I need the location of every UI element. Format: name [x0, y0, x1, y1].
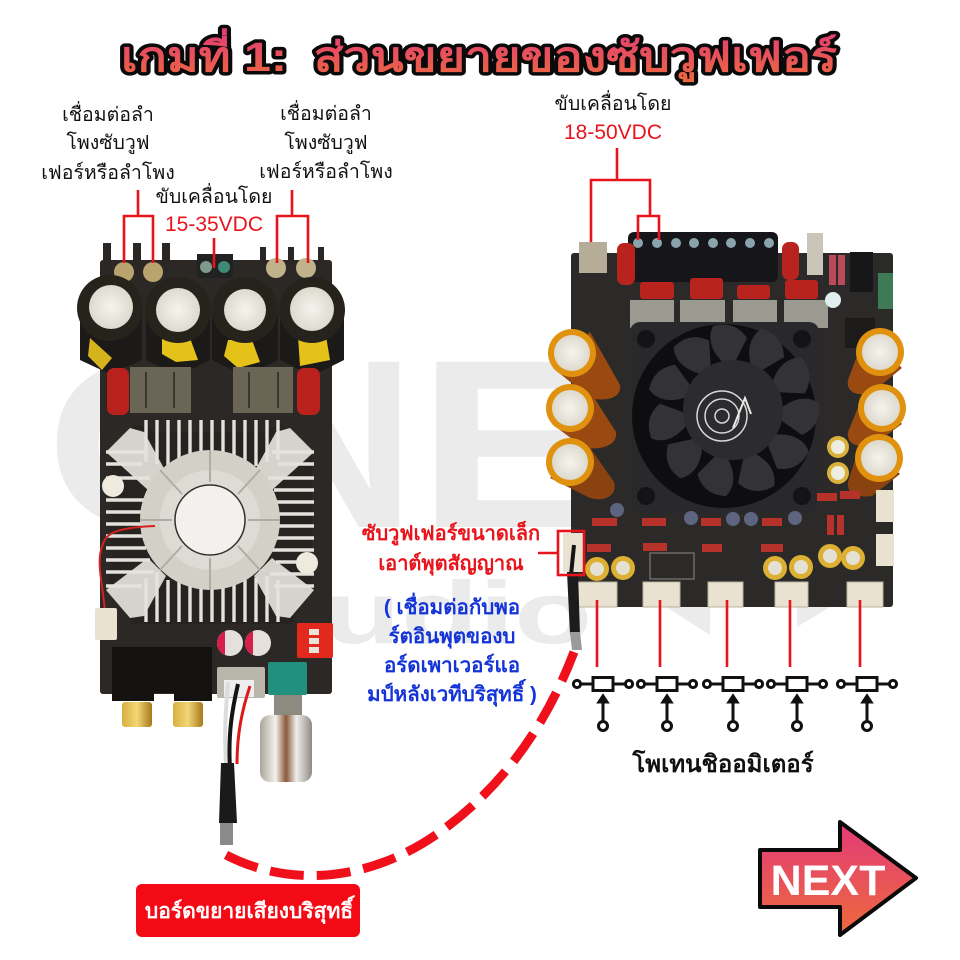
power jack [579, 242, 607, 273]
large capacitors [77, 275, 345, 376]
labels: left speaker output: เฟอร์หรือลำโพง [41, 161, 175, 184]
watermark: N [242, 310, 415, 578]
panel: left amplifier board [77, 243, 345, 845]
labels: right speaker output: เฟอร์หรือลำโพง [259, 160, 393, 183]
inductor row [630, 300, 828, 328]
watermark: O [45, 311, 269, 579]
side connectors [876, 490, 894, 566]
note: connect to power amp input [367, 592, 537, 707]
watermark: audio [252, 564, 592, 662]
label: subwoofer output: ซับวูฟเฟอร์ขนาดเล็ก [362, 520, 540, 547]
orange capacitors right [827, 328, 906, 496]
left speaker terminals [103, 243, 324, 282]
potentiometer 4 [767, 678, 827, 730]
note: connect to power amp input: อร์ดเพาเวอร์แอ [384, 653, 520, 677]
small electrolytic capacitors [217, 630, 271, 656]
potentiometer 3 [703, 678, 763, 730]
label: subwoofer output: เอาต์พุตสัญญาณ [378, 552, 524, 576]
red wires and small connector [95, 526, 155, 640]
left board PCB [100, 260, 332, 694]
labels: left speaker output [41, 101, 175, 184]
wire connector and cable [217, 667, 265, 845]
labels: right speaker output: โพงซับวูฟ [284, 131, 368, 155]
switch, audio jack, bluetooth [807, 233, 893, 348]
arrow: next: NEXT [771, 857, 885, 905]
label: potentiometer: โพเทนชิออมิเตอร์ [631, 749, 814, 778]
potentiometer 1 [573, 678, 633, 730]
potentiometer 2 [637, 678, 697, 730]
button: pure amp board [136, 884, 360, 937]
label: left board power [156, 183, 272, 236]
heatsink [102, 420, 318, 624]
red film capacitors [107, 368, 320, 415]
watermark: E [417, 311, 609, 579]
red connection lines left board [124, 190, 308, 268]
arrow: next [760, 822, 916, 935]
cooling fan [630, 322, 821, 514]
panel: right amplifier board [546, 232, 906, 650]
note: connect to power amp input: มป์หลังเวทีบริสุทธิ์ ) [367, 678, 537, 707]
RCA input jacks [112, 647, 212, 727]
green potentiometer and knob [260, 662, 312, 782]
label: right board power [555, 90, 671, 144]
lower board components [585, 491, 865, 581]
label: left board power: ขับเคลื่อนโดย [156, 183, 272, 208]
labels: right speaker output [259, 100, 393, 183]
right board PCB [571, 253, 893, 607]
arrow: dashed connection curve [226, 652, 574, 876]
labels: left speaker output: เชื่อมต่อลำ [62, 101, 154, 126]
red connection lines right board [538, 148, 860, 667]
orange capacitors left [546, 329, 620, 499]
button: pure amp board: บอร์ดขยายเสียงบริสุทธิ์ [145, 895, 355, 925]
sub output connector and cable [563, 533, 583, 650]
note: connect to power amp input: ร์ตอินพุตของบ [389, 624, 515, 649]
speaker terminal block [628, 232, 778, 282]
label: left board power: 15-35VDC [165, 213, 263, 236]
potentiometer 5 [837, 678, 897, 730]
labels: left speaker output: โพงซับวูฟ [66, 131, 150, 155]
DIP switch [297, 623, 333, 658]
bottom connectors [577, 582, 883, 607]
label: right board power: 18-50VDC [564, 121, 662, 144]
red capacitors top [617, 242, 818, 299]
labels: right speaker output: เชื่อมต่อลำ [280, 100, 372, 125]
inductors [130, 367, 293, 413]
label: subwoofer output [362, 520, 540, 576]
note: connect to power amp input: ( เชื่อมต่อกับพอ [384, 592, 520, 619]
title: เกมที่ 1: ส่วนขยายของซับวูฟเฟอร์ [121, 28, 837, 83]
watermark [45, 310, 830, 662]
potentiometer symbols [573, 678, 897, 730]
label: right board power: ขับเคลื่อนโดย [555, 90, 671, 115]
